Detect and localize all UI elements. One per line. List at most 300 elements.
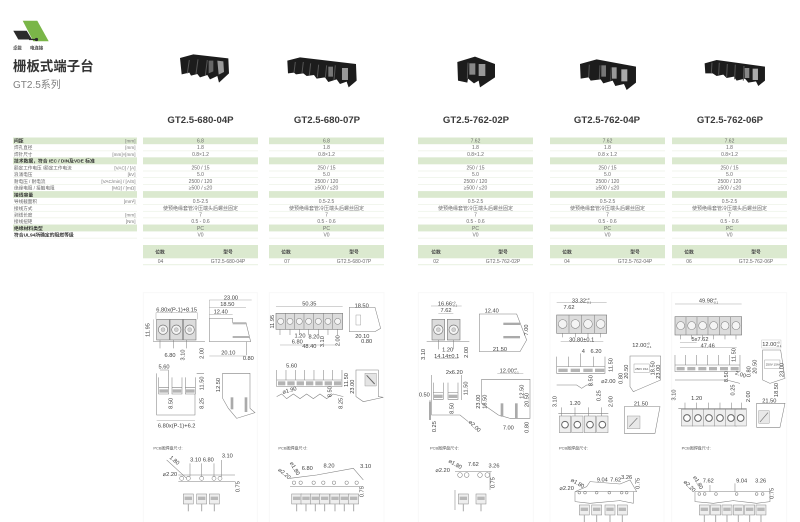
- section view: 8.25: [338, 398, 344, 409]
- order table: GT2.5-762-04P: 04: [564, 259, 570, 265]
- section view: 5.60: [286, 364, 297, 370]
- PCB footprint: 9.04: [736, 478, 747, 484]
- panel: spec column GT2.5-762-06P: 0.5-2.5: [722, 199, 737, 205]
- order table: GT2.5-762-06P: [672, 245, 787, 265]
- order table: GT2.5-762-02P: 型号: [498, 248, 508, 255]
- front view: 1.20: [294, 334, 305, 340]
- panel: spec column GT2.5-680-07P: 0.8×1.2: [318, 152, 335, 158]
- section side view: +0: [514, 367, 517, 371]
- front view: 2.00: [464, 347, 470, 358]
- panel: spec column GT2.5-762-02P: 0.5-2.5: [468, 199, 483, 205]
- section view: 11.50: [463, 381, 469, 395]
- panel: specification labels: 额定工作电压 /额定工作电流: [14, 165, 72, 172]
- panel: spec column GT2.5-762-04P: 250 / 15: [598, 166, 617, 172]
- logo: 电连接: [30, 44, 44, 52]
- section side view: 12.50: [519, 385, 525, 399]
- panel: specification labels: 绝缘电阻 / 接触电阻: [14, 185, 55, 192]
- panel: specification labels: [mm]: [125, 213, 136, 218]
- front view: 6.80: [292, 340, 303, 346]
- panel: spec column GT2.5-680-04P: 7: [199, 213, 202, 219]
- bottom view: 2.00: [746, 391, 752, 402]
- order table: GT2.5-680-07P: [269, 245, 384, 265]
- panel: spec column GT2.5-680-04P: 0.5-2.5: [193, 199, 208, 205]
- side view: +0: [776, 341, 780, 345]
- side view: 18.50: [220, 302, 234, 308]
- PCB footprint: ⌀2.20: [277, 467, 291, 481]
- section view: 8.50: [588, 375, 594, 386]
- front view: 6.80x(P-1)+8.15: [156, 308, 197, 314]
- bottom side view: 21.50: [762, 398, 776, 404]
- section view: [419, 370, 481, 434]
- panel: spec column GT2.5-762-02P: 2500 / 120: [464, 179, 488, 185]
- panel: spec column GT2.5-680-07P: V0: [323, 233, 330, 239]
- section view: 11.50: [609, 358, 615, 372]
- panel: spec column GT2.5-762-06P: [672, 138, 787, 239]
- panel: spec column GT2.5-680-04P: 0.5 - 0.6: [191, 219, 210, 225]
- panel: specification labels: 技术数据，符合 IEC / DIN及VDE 标准: [14, 158, 95, 165]
- panel: spec column GT2.5-680-07P: 7: [325, 213, 328, 219]
- PCB footprint: 7.62: [610, 478, 621, 484]
- PCB footprint: ⌀1.80: [288, 461, 300, 477]
- panel: drawings GT2.5-762-06P: [672, 293, 787, 522]
- panel: drawings GT2.5-762-02P: [418, 293, 533, 522]
- front view: 11.95: [270, 315, 276, 329]
- order table: GT2.5-762-06P: 位数: [684, 248, 694, 255]
- PCB footprint: 3.10: [360, 464, 371, 470]
- section view: 0.25: [731, 384, 737, 395]
- side view: 12.40: [485, 309, 499, 315]
- panel: spec column GT2.5-762-06P: 1.8: [726, 145, 733, 151]
- side view: 250V 15A: [766, 362, 779, 366]
- front view: -0.1: [713, 300, 718, 304]
- PCB footprint: [682, 445, 775, 522]
- section view: 5.60: [158, 364, 170, 370]
- PCB footprint: ⌀2.20: [163, 472, 177, 478]
- side view: 12.40: [214, 309, 228, 315]
- front view: 11.95: [145, 323, 151, 337]
- side view: [747, 340, 785, 397]
- panel: drawings GT2.5-680-04P: [143, 293, 257, 522]
- panel: spec column GT2.5-680-04P: PC: [197, 226, 204, 232]
- PCB footprint: 6.80: [203, 458, 214, 464]
- panel: spec column GT2.5-762-02P: 1.8: [472, 145, 479, 151]
- section view: 8.50: [169, 398, 175, 409]
- panel: specification labels: 导线截面积: [14, 198, 37, 205]
- panel: spec column GT2.5-680-04P: V0: [197, 233, 204, 239]
- bottom view: 3.10: [672, 389, 678, 400]
- section view: [557, 349, 616, 401]
- PCB footprint: 0.75: [359, 486, 365, 497]
- order table: GT2.5-762-04P: 型号: [630, 248, 640, 255]
- PCB footprint: 7.62: [703, 478, 714, 484]
- side view: 12.00: [762, 342, 776, 348]
- side view: 7.00: [524, 324, 530, 336]
- front view: -0.1: [452, 304, 457, 308]
- panel: spec column GT2.5-680-04P: ≥500 / ≤20: [189, 186, 212, 192]
- order table: GT2.5-680-07P: 位数: [281, 248, 291, 255]
- bottom view: 2.00: [608, 396, 614, 407]
- side view: -0.1: [646, 345, 652, 349]
- section view: ⌀2.00: [467, 419, 481, 434]
- bottom view: 1.20: [569, 401, 581, 407]
- section side view: 18.50: [483, 395, 489, 409]
- panel: spec column GT2.5-762-04P: 7: [606, 213, 609, 219]
- PCB footprint: 0.75: [235, 481, 241, 492]
- bottom view: [672, 389, 752, 426]
- PCB footprint: [559, 445, 641, 522]
- order table: GT2.5-762-04P: 位数: [562, 248, 572, 255]
- panel: specification labels: 剥线长度: [14, 212, 33, 219]
- panel: spec column GT2.5-762-02P: 5.0: [472, 172, 479, 178]
- panel: spec column GT2.5-762-06P: V0: [726, 233, 733, 239]
- PCB footprint: PCB图焊盘尺寸:: [430, 445, 459, 451]
- panel: spec column GT2.5-762-06P: 使预绝缘套管冷压端头后螺丝固定: [692, 205, 767, 212]
- front view: +0: [452, 300, 456, 304]
- PCB footprint: 8.20: [323, 463, 334, 469]
- side view: 18.50: [774, 383, 780, 397]
- panel: spec column GT2.5-680-07P: 250 / 15: [317, 166, 336, 172]
- PCB footprint: PCB图焊盘尺寸:: [559, 445, 588, 451]
- product photo: GT2.5-680-07P: [287, 57, 357, 87]
- panel: spec column GT2.5-762-02P: 7.62: [471, 139, 481, 145]
- panel: spec column GT2.5-680-04P: 2500 / 120: [189, 179, 213, 185]
- panel: specification labels: [13, 138, 137, 239]
- PCB footprint: 3.10: [222, 454, 233, 460]
- side view: [479, 309, 530, 353]
- panel: specification labels: 焊针尺寸: [14, 151, 33, 158]
- order table: GT2.5-762-06P: GT2.5-762-06P: [739, 259, 774, 265]
- panel: spec column GT2.5-762-06P: 7: [728, 213, 731, 219]
- section view: 0.25: [432, 421, 438, 432]
- section view: [157, 364, 205, 429]
- panel: spec column GT2.5-762-06P: 2500 / 120: [718, 179, 742, 185]
- front view: 3.10: [181, 349, 187, 361]
- panel: drawings GT2.5-680-07P: [269, 293, 384, 522]
- panel: drawings GT2.5-762-04P: [550, 293, 664, 522]
- PCB footprint: 7.62: [468, 462, 479, 468]
- PCB footprint: 6.80: [302, 466, 313, 472]
- section view: 8.50: [724, 371, 730, 382]
- panel: spec column GT2.5-680-07P: [269, 138, 384, 239]
- panel: specification labels: 浪涌电压: [14, 171, 33, 178]
- bottom view: 1.20: [691, 396, 702, 402]
- panel: spec column GT2.5-680-07P: 5.0: [323, 172, 330, 178]
- panel: spec column GT2.5-680-07P: 2500 / 120: [315, 179, 339, 185]
- logo: [13, 21, 49, 52]
- model name: GT2.5-680-04P: GT2.5-680-04P: [167, 115, 234, 126]
- section view: 6.80x(P-1)+6.2: [158, 423, 195, 429]
- side view: 0.80: [618, 373, 624, 384]
- panel: spec column GT2.5-680-04P: 5.0: [197, 172, 204, 178]
- side view: 20.50: [624, 365, 630, 379]
- section side view: 0.80: [524, 422, 530, 433]
- panel: specification labels: [MΩ] / [mΩ]: [112, 186, 136, 191]
- order table: GT2.5-762-04P: GT2.5-762-04P: [618, 259, 653, 265]
- order table: GT2.5-680-04P: 位数: [155, 248, 165, 255]
- panel: spec column GT2.5-762-06P: 0.8×1.2: [721, 152, 738, 158]
- side view: 20.10: [355, 334, 369, 340]
- side view: 18.50: [355, 303, 369, 309]
- product photo: GT2.5-762-06P: [705, 60, 765, 86]
- panel: specification labels: 接线扭矩: [14, 218, 33, 225]
- panel: spec column GT2.5-680-04P: 使预绝缘套管冷压端头后螺丝固定: [163, 205, 238, 212]
- section view: 6.20: [590, 349, 602, 355]
- PCB footprint: 9.04: [597, 478, 608, 484]
- front view: [270, 302, 343, 350]
- panel: spec column GT2.5-762-06P: 5.0: [726, 172, 733, 178]
- section side view: 7.00: [503, 425, 514, 431]
- front view: 7.62: [563, 305, 575, 311]
- panel: specification labels: [Nm]: [126, 219, 136, 224]
- order table: GT2.5-762-02P: 02: [433, 259, 439, 265]
- side view: 23.00: [779, 363, 785, 377]
- section side view: -0.1: [514, 370, 519, 374]
- model name: GT2.5-762-04P: GT2.5-762-04P: [574, 115, 641, 126]
- panel: spec column GT2.5-762-04P: ≥500 / ≤20: [596, 186, 619, 192]
- model name: GT2.5-680-07P: GT2.5-680-07P: [294, 115, 361, 126]
- panel: spec column GT2.5-762-06P: PC: [726, 226, 733, 232]
- side view: +0: [646, 342, 650, 346]
- section view: ⌀1.90: [282, 386, 297, 396]
- front view: 1.20: [442, 347, 453, 353]
- model name: GT2.5-762-06P: GT2.5-762-06P: [697, 115, 764, 126]
- panel: specification labels: [mm²]: [124, 199, 136, 204]
- PCB footprint: PCB图焊盘尺寸:: [682, 445, 711, 451]
- panel: spec column GT2.5-762-04P: V0: [604, 233, 611, 239]
- order table: GT2.5-680-04P: [143, 245, 258, 265]
- section side view: 20.50: [524, 393, 530, 407]
- panel: spec column GT2.5-762-06P: 0.5 - 0.6: [720, 219, 739, 225]
- PCB footprint: [153, 445, 241, 511]
- logo: 卓能: [13, 44, 22, 52]
- front view: 48.40: [302, 344, 316, 350]
- bottom view: [552, 396, 614, 433]
- front view: 2.00: [335, 335, 341, 346]
- front view: 2.00: [199, 348, 205, 359]
- order table: GT2.5-762-02P: GT2.5-762-02P: [486, 259, 521, 265]
- side view: 23.00: [224, 295, 238, 301]
- panel: spec column GT2.5-762-04P: 使预绝缘套管冷压端头后螺丝固定: [570, 205, 645, 212]
- section side view: 12.00: [500, 368, 514, 374]
- panel: spec column GT2.5-762-02P: ≥500 / ≤20: [464, 186, 487, 192]
- panel: spec column GT2.5-762-02P: 7: [474, 213, 477, 219]
- section view: 2x6.20: [446, 370, 463, 376]
- panel: spec column GT2.5-762-04P: 7.62: [603, 139, 613, 145]
- PCB footprint: 3.26: [488, 464, 499, 470]
- front view: 47.46: [701, 343, 715, 349]
- panel: specification labels: 耐电压 / 耐电流: [14, 178, 46, 185]
- panel: spec column GT2.5-680-07P: 1.8: [323, 145, 330, 151]
- front view: 7.62: [440, 308, 452, 314]
- PCB footprint: 0.75: [769, 488, 775, 499]
- panel: spec column GT2.5-762-02P: 250 / 15: [466, 166, 485, 172]
- panel: spec column GT2.5-680-04P: 1.8: [197, 145, 204, 151]
- section view: 23.00: [350, 380, 356, 394]
- PCB footprint: 1.80: [168, 455, 180, 467]
- panel: spec column GT2.5-680-07P: 使预绝缘套管冷压端头后螺丝固定: [289, 205, 364, 212]
- PCB footprint: ⌀2.20: [435, 468, 450, 474]
- panel: spec column GT2.5-762-04P: 1.8: [604, 145, 611, 151]
- panel: spec column GT2.5-680-04P: 250 / 15: [191, 166, 210, 172]
- bottom side view: [757, 398, 785, 427]
- model name: GT2.5-762-02P: GT2.5-762-02P: [443, 115, 510, 126]
- panel: spec column GT2.5-680-07P: PC: [323, 226, 330, 232]
- order table: GT2.5-680-04P: 型号: [223, 248, 233, 255]
- PCB footprint: [277, 445, 371, 511]
- order table: GT2.5-680-07P: GT2.5-680-07P: [337, 259, 372, 265]
- side view: [618, 342, 662, 392]
- section view: 0.50: [419, 393, 430, 399]
- product photo: GT2.5-762-04P: [580, 59, 636, 90]
- front view: 8.20: [308, 335, 319, 341]
- PCB footprint: [430, 445, 499, 511]
- panel: specification labels: [mm]×[mm]: [112, 152, 136, 157]
- PCB footprint: 3.10: [190, 458, 201, 464]
- order table: GT2.5-762-02P: 位数: [431, 248, 441, 255]
- PCB footprint: ⌀1.80: [447, 459, 463, 471]
- panel: specification labels: [kV]: [128, 172, 136, 177]
- PCB footprint: ⌀1.80: [569, 478, 585, 490]
- order table: GT2.5-680-04P: 04: [158, 259, 163, 265]
- section view: 8.50: [328, 386, 334, 397]
- front view: [145, 308, 205, 361]
- bottom side view: 21.50: [634, 402, 648, 408]
- side view: 18.50: [651, 361, 657, 375]
- front view: [675, 297, 742, 349]
- PCB footprint: 3.26: [755, 478, 766, 484]
- panel: spec column GT2.5-680-04P: [143, 138, 258, 239]
- section view: 4: [582, 349, 585, 355]
- side view: 0.80: [361, 339, 372, 345]
- panel: spec column GT2.5-680-04P: 0.8×1.2: [192, 152, 209, 158]
- front view: -0.1: [586, 300, 591, 304]
- panel: spec column GT2.5-762-06P: 250 / 15: [720, 166, 739, 172]
- panel: spec column GT2.5-762-02P: V0: [472, 233, 479, 239]
- panel: spec column GT2.5-762-02P: 0.8×1.2: [467, 152, 484, 158]
- order table: GT2.5-762-02P: [418, 245, 533, 265]
- panel: spec column GT2.5-762-04P: PC: [604, 226, 611, 232]
- panel: spec column GT2.5-762-04P: 0.5-2.5: [600, 199, 615, 205]
- panel: spec column GT2.5-762-02P: 0.5 - 0.6: [466, 219, 485, 225]
- panel: spec column GT2.5-762-06P: 7.62: [725, 139, 735, 145]
- panel: specification labels: [VAC] / [A]: [114, 166, 136, 171]
- side view: 20.50: [752, 360, 758, 374]
- panel: specification labels: [mm]: [125, 145, 136, 150]
- front view: [557, 297, 607, 343]
- order table: GT2.5-762-06P: 型号: [751, 248, 761, 255]
- side view: 250V 15A: [635, 367, 648, 371]
- PCB footprint: ⌀1.80: [691, 475, 704, 491]
- product photo: GT2.5-680-04P: [180, 54, 229, 83]
- subtitle: GT2.5系列: [13, 78, 61, 91]
- section view: 8.25: [199, 398, 205, 409]
- order table: GT2.5-762-06P: 06: [686, 259, 692, 265]
- title: 栅板式端子台: [13, 58, 94, 74]
- panel: specification labels: 符合UL94所确定的阻燃等级: [14, 232, 74, 239]
- panel: spec column GT2.5-762-06P: ≥500 / ≤20: [718, 186, 741, 192]
- panel: specification labels: 焊孔直径: [14, 144, 33, 151]
- order table: GT2.5-680-04P: GT2.5-680-04P: [211, 259, 246, 265]
- front view: 33.32: [572, 298, 586, 304]
- side view: 0.80: [747, 366, 753, 377]
- front view: 5x7.62: [691, 337, 708, 343]
- front view: 49.98: [699, 298, 713, 304]
- front view: 14.14±0.1: [434, 354, 459, 360]
- panel: spec column GT2.5-762-04P: 5.0: [604, 172, 611, 178]
- section side view: [476, 367, 530, 433]
- panel: specification labels: 间距: [14, 138, 24, 145]
- front view: +0: [713, 297, 717, 301]
- panel: spec column GT2.5-762-04P: 2500 / 120: [596, 179, 620, 185]
- section side view: [216, 373, 255, 418]
- section view: 11.50: [344, 373, 350, 387]
- PCB footprint: 0.75: [491, 477, 497, 488]
- panel: specification labels: 绝缘材料类型: [14, 225, 43, 232]
- front view: 6.80: [164, 353, 176, 359]
- section view: 11.50: [732, 348, 738, 362]
- side view: [349, 303, 381, 345]
- side view: 20.10: [221, 350, 235, 356]
- panel: spec column GT2.5-680-07P: ≥500 / ≤20: [315, 186, 338, 192]
- PCB footprint: ⌀2.20: [559, 486, 574, 492]
- panel: spec column GT2.5-762-04P: [550, 138, 665, 239]
- front view: 3.10: [421, 349, 427, 360]
- order table: GT2.5-680-07P: 型号: [349, 248, 359, 255]
- panel: specification labels: 接线容量: [14, 191, 33, 198]
- section view: [675, 348, 747, 395]
- front view: 30.80±0.1: [569, 337, 594, 343]
- panel: specification labels: [VAC/min] / [A/S]: [101, 179, 136, 184]
- panel: spec column GT2.5-762-04P: 0.5 - 0.6: [598, 219, 617, 225]
- front view: 16.66: [438, 302, 452, 308]
- front view: [421, 300, 470, 360]
- panel: spec column GT2.5-762-02P: PC: [472, 226, 479, 232]
- product photo: GT2.5-762-02P: [457, 57, 495, 87]
- section view: 8.50: [449, 403, 455, 414]
- side view: 12.00: [632, 343, 646, 349]
- bottom side view: [624, 402, 660, 433]
- panel: spec column GT2.5-680-07P: 0.5 - 0.6: [317, 219, 336, 225]
- section view: 11.50: [199, 376, 205, 390]
- side view: [209, 295, 254, 362]
- panel: specification labels: 接线方式: [14, 205, 33, 212]
- section side view: 23.00: [476, 395, 482, 409]
- order table: GT2.5-762-04P: [550, 245, 665, 265]
- section side view: [356, 370, 383, 402]
- section view: 0.25: [597, 390, 603, 401]
- side view: 23.00: [656, 365, 662, 379]
- panel: spec column GT2.5-762-02P: 使预绝缘套管冷压端头后螺丝固定: [438, 205, 513, 212]
- PCB footprint: ⌀2.20: [682, 479, 696, 494]
- panel: spec column GT2.5-762-04P: 0.8 x 1.2: [598, 152, 617, 158]
- front view: 3.10: [320, 336, 326, 347]
- front view: 50.35: [302, 302, 316, 308]
- order table: GT2.5-680-07P: 07: [284, 259, 290, 265]
- section side view: 12.50: [216, 378, 222, 392]
- side view: 0.80: [243, 356, 254, 362]
- panel: spec column GT2.5-680-07P: 0.5-2.5: [319, 199, 334, 205]
- section view: [277, 364, 356, 409]
- PCB footprint: PCB图焊盘尺寸:: [153, 445, 183, 451]
- panel: spec column GT2.5-680-04P: 6.8: [197, 139, 204, 145]
- panel: spec column GT2.5-762-02P: [418, 138, 533, 239]
- bottom view: 3.10: [552, 396, 558, 407]
- side view: -0.1: [776, 344, 782, 348]
- PCB footprint: PCB图焊盘尺寸:: [278, 445, 308, 451]
- side view: 21.50: [493, 347, 507, 353]
- section view: 2.00: [734, 370, 747, 380]
- front view: +0: [586, 297, 590, 301]
